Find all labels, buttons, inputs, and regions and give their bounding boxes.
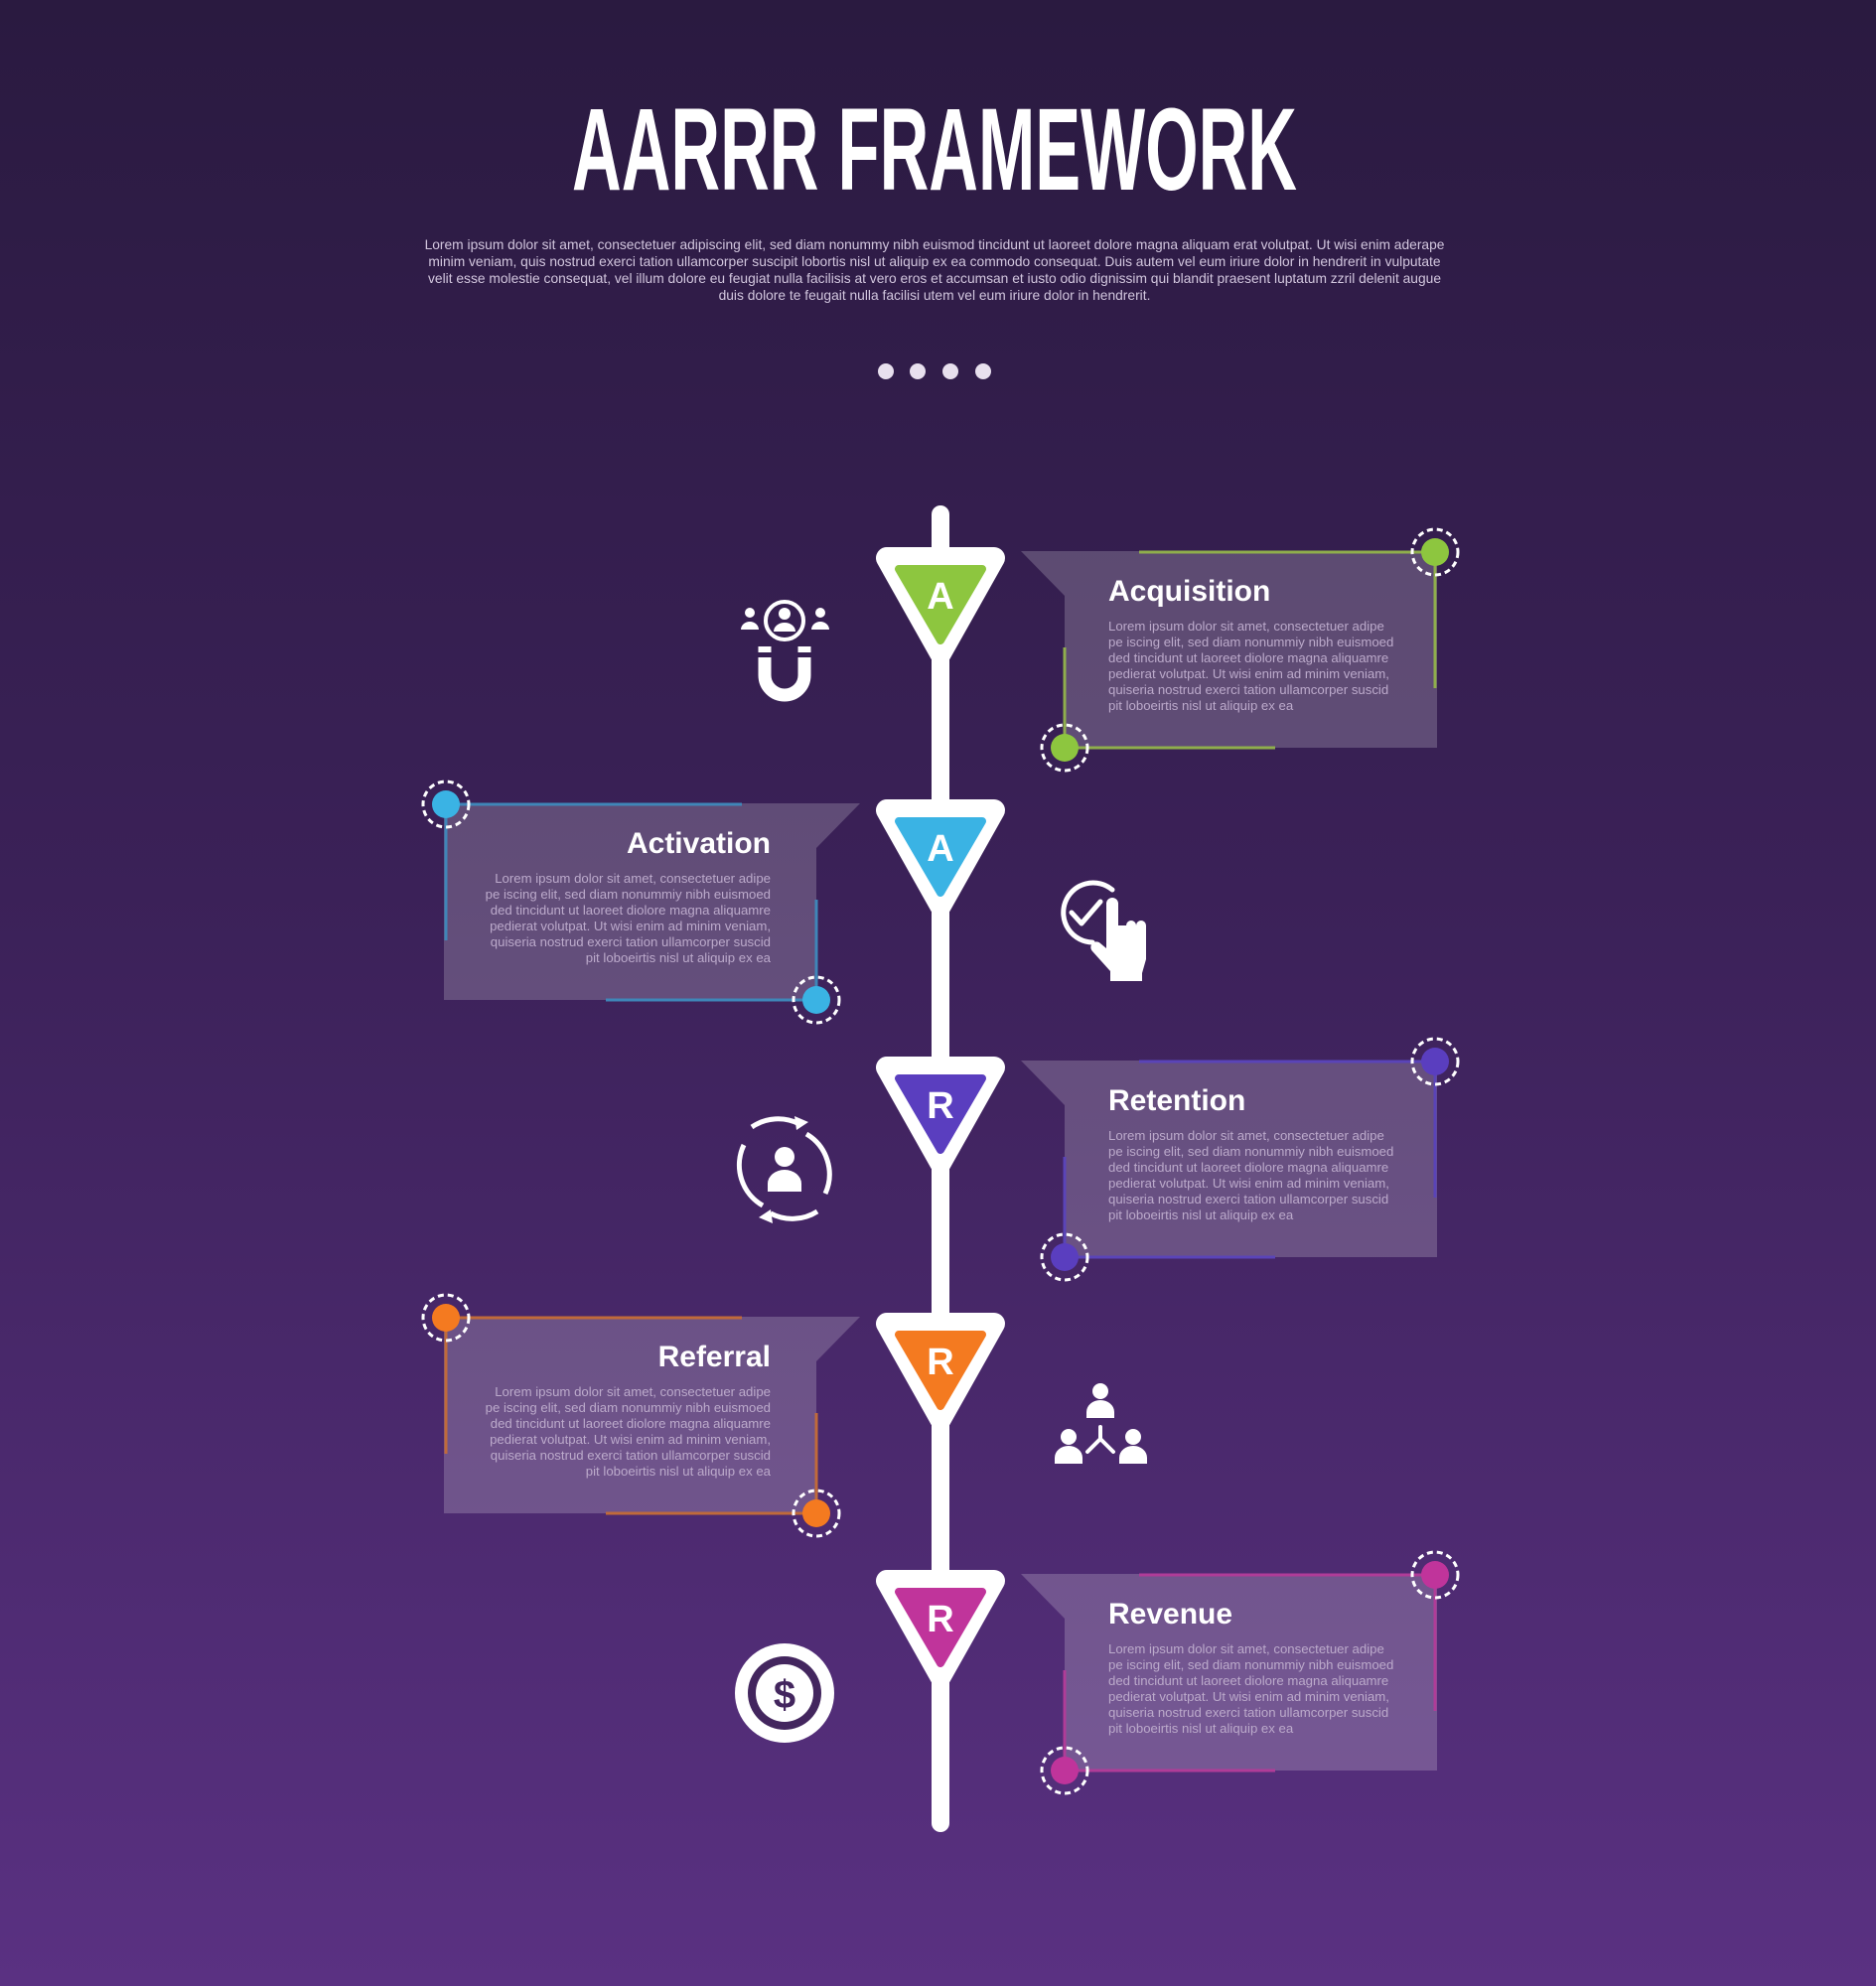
intro paragraph [425,237,1445,303]
text box: Retention: Retention [1108,1084,1245,1117]
text box: Revenue: Lorem ipsum dolor sit amet, consectetuer adipe [1108,1641,1384,1656]
text box: Acquisition: ded tincidunt ut laoreet diolore magna aliquamre [1108,650,1388,665]
text box: Acquisition: quiseria nostrud exerci tation ullamcorper suscid [1108,682,1388,697]
text box: Revenue: ded tincidunt ut laoreet diolore magna aliquamre [1108,1673,1388,1688]
text box: Retention: pit loboeirtis nisl ut aliquip ex ea [1108,1207,1294,1222]
text box: Referral: Lorem ipsum dolor sit amet, consectetuer adipe [495,1384,771,1399]
marker A: A [927,576,954,618]
marker A: A [927,828,954,870]
icon: dollar coin [735,1643,834,1743]
text box: Referral: pe iscing elit, sed diam nonummiy nibh euismoed [486,1400,771,1415]
text box: Revenue: quiseria nostrud exerci tation ullamcorper suscid [1108,1705,1388,1720]
intro paragraph: duis dolore te feugait nulla facilisi utem vel eum iriure dolor in hendrerit. [719,288,1150,303]
text box: Acquisition: pe iscing elit, sed diam nonummiy nibh euismoed [1108,635,1393,649]
marker R [887,1581,994,1676]
decorative dots [878,363,991,379]
text box: Retention: ded tincidunt ut laoreet diolore magna aliquamre [1108,1160,1388,1175]
text box: Revenue: pit loboeirtis nisl ut aliquip ex ea [1108,1721,1294,1736]
marker R [887,1067,994,1163]
text box: Activation: pe iscing elit, sed diam nonummiy nibh euismoed [486,887,771,902]
text box: Activation: pit loboeirtis nisl ut aliquip ex ea [586,950,772,965]
text box: Activation: Lorem ipsum dolor sit amet, consectetuer adipe [495,871,771,886]
step 5: Revenue [735,1552,1458,1793]
marker A [887,558,994,653]
marker R [887,1324,994,1419]
icon: referral network [1055,1383,1147,1464]
text box: Referral: pit loboeirtis nisl ut aliquip ex ea [586,1464,772,1479]
text box: Referral [423,1295,860,1536]
text box: Revenue: pe iscing elit, sed diam nonummiy nibh euismoed [1108,1657,1393,1672]
text box: Acquisition: Lorem ipsum dolor sit amet, consectetuer adipe [1108,619,1384,634]
icon: check and hand tap [1064,883,1146,981]
icon: dollar coin: $ [774,1673,795,1717]
marker A [887,810,994,906]
step 4: Referral [423,1295,1147,1536]
text box: Retention: pedierat volutpat. Ut wisi enim ad minim veniam, [1108,1176,1389,1191]
text box: Retention [1021,1039,1458,1280]
text box: Activation: ded tincidunt ut laoreet diolore magna aliquamre [491,903,771,918]
text box: Activation [423,781,860,1023]
text box: Acquisition: pedierat volutpat. Ut wisi enim ad minim veniam, [1108,666,1389,681]
text box: Revenue [1021,1552,1458,1793]
text box: Acquisition [1021,529,1458,771]
marker R: R [927,1085,954,1127]
intro paragraph: Lorem ipsum dolor sit amet, consectetuer adipiscing elit, sed diam nonummy nibh euismod tincidunt ut laoreet dolore magna aliquam erat volutpat. Ut wisi enim aderape [425,237,1445,252]
intro paragraph: minim veniam, quis nostrud exerci tation ullamcorper suscipit lobortis nisl ut aliquip ex ea commodo consequat. Duis autem vel eum iriure dolor in hendrerit in vulputate [428,254,1441,269]
text box: Revenue: pedierat volutpat. Ut wisi enim ad minim veniam, [1108,1689,1389,1704]
marker R: R [927,1599,954,1640]
text box: Retention: Lorem ipsum dolor sit amet, consectetuer adipe [1108,1128,1384,1143]
text box: Activation: quiseria nostrud exerci tation ullamcorper suscid [491,934,771,949]
text box: Referral: quiseria nostrud exerci tation ullamcorper suscid [491,1448,771,1463]
text box: Referral: ded tincidunt ut laoreet diolore magna aliquamre [491,1416,771,1431]
marker R: R [927,1342,954,1383]
title: AARRR FRAMEWORK [572,84,1297,215]
text box: Revenue: Revenue [1108,1598,1232,1631]
step 2: Activation [423,781,1146,1023]
text box: Referral: pedierat volutpat. Ut wisi enim ad minim veniam, [490,1432,771,1447]
text box: Retention: quiseria nostrud exerci tation ullamcorper suscid [1108,1192,1388,1206]
step 3: Retention [739,1039,1458,1280]
timeline vertical line [932,514,949,1823]
text box: Acquisition: Acquisition [1108,575,1270,608]
text box: Activation: Activation [627,827,771,860]
text box: Referral: Referral [658,1341,771,1373]
text box: Acquisition: pit loboeirtis nisl ut aliquip ex ea [1108,698,1294,713]
icon: magnet attracting people [741,602,829,695]
text box: Retention: pe iscing elit, sed diam nonummiy nibh euismoed [1108,1144,1393,1159]
intro paragraph: velit esse molestie consequat, vel illum dolore eu feugiat nulla facilisis at vero eros et accumsan et iusto odio dignissim qui blandit praesent luptatum zzril delenit augue [428,271,1441,286]
icon: retention cycle [739,1116,829,1223]
step 1: Acquisition [741,529,1458,771]
text box: Activation: pedierat volutpat. Ut wisi enim ad minim veniam, [490,919,771,933]
